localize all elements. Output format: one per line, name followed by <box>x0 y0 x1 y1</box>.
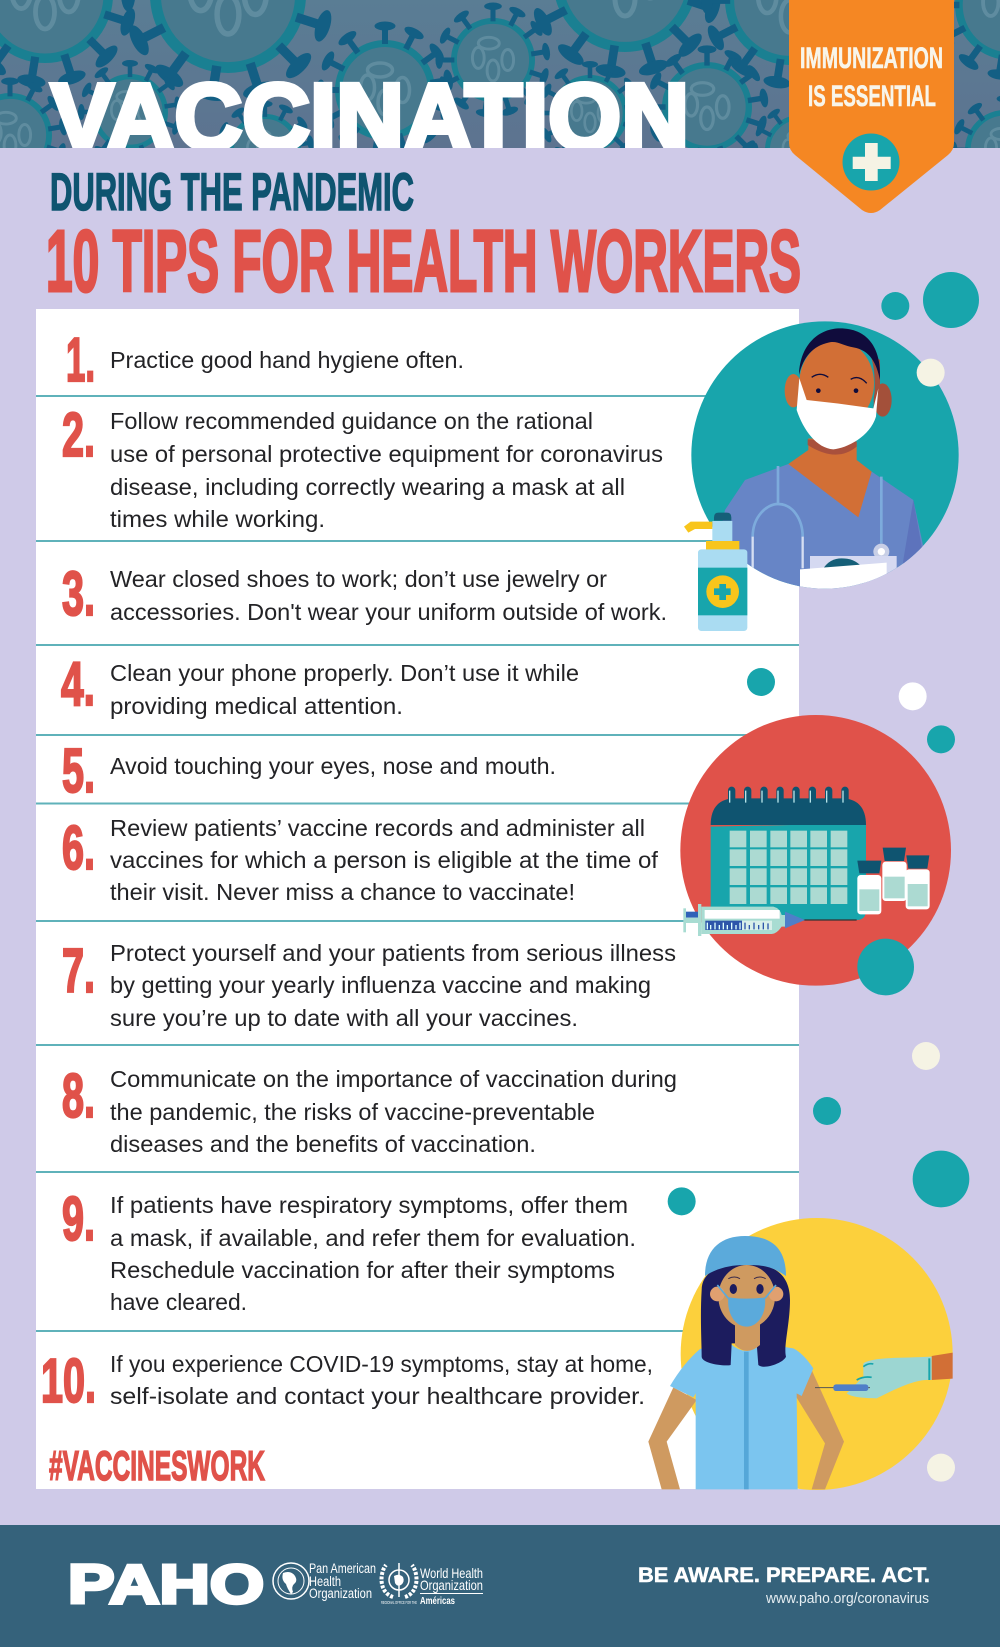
tip 6 <box>62 814 659 905</box>
tip 8: the pandemic, the risks of vaccine-preventable <box>110 1099 595 1125</box>
tip 1: Practice good hand hygiene often. <box>110 347 464 373</box>
icon: calendar <box>711 787 866 920</box>
tip 9: 9. <box>62 1185 95 1254</box>
icon: syringe <box>683 904 857 936</box>
icon: sanitizer bottle <box>684 513 747 631</box>
tip 1: 1. <box>66 326 95 395</box>
logo: PAHO wordmark: PAHO <box>68 1553 264 1615</box>
tip 8: 8. <box>62 1062 95 1131</box>
website: www.paho.org/coronavirus <box>765 1590 929 1607</box>
text: World Health Organization Americas: Américas <box>420 1595 455 1607</box>
tip 10: self-isolate and contact your healthcare provider. <box>110 1383 645 1409</box>
panel: tips list <box>36 309 799 1489</box>
slogan: BE AWARE. PREPARE. ACT. <box>638 1564 930 1587</box>
footer band <box>0 1525 1000 1647</box>
tip 7: 7. <box>62 937 95 1006</box>
tip 2: Follow recommended guidance on the rational <box>110 408 593 434</box>
tip 3 <box>62 560 667 629</box>
tip 5: Avoid touching your eyes, nose and mouth. <box>110 753 556 779</box>
header virus pattern band <box>0 0 1000 148</box>
text: World Health Organization Americas <box>381 1565 483 1607</box>
decorative dots between illustrations <box>813 1042 940 1125</box>
icon: PAHO globe emblem <box>273 1563 309 1599</box>
tip 2: 2. <box>62 401 95 470</box>
icon: gloved hand with syringe <box>815 1353 953 1398</box>
icon: vials <box>857 848 930 914</box>
text: World Health Organization Americas: Organization <box>420 1577 483 1593</box>
tip 1 <box>66 326 464 395</box>
tip 4: providing medical attention. <box>110 693 403 719</box>
tip 7 <box>62 937 676 1031</box>
tip 2 <box>62 401 663 532</box>
icon: WHO emblem <box>382 1563 416 1597</box>
tip 8 <box>62 1062 677 1157</box>
tip 2: times while working. <box>110 506 325 532</box>
title: vaccination: VACCINATION <box>51 64 689 169</box>
tip 7: by getting your yearly influenza vaccine and making <box>110 972 651 998</box>
orange ribbon: immunization is essential <box>789 0 954 213</box>
tip 9 <box>62 1185 636 1315</box>
tip 8: diseases and the benefits of vaccination. <box>110 1131 536 1157</box>
tip 9: Reschedule vaccination for after their symptoms <box>110 1257 615 1283</box>
tip 4 <box>61 650 579 719</box>
illustration: nurse with hand sanitizer <box>684 272 979 631</box>
tip 8: Communicate on the importance of vaccination during <box>110 1066 677 1092</box>
tip 4: 4. <box>61 650 95 719</box>
hashtag: #VACCINESWORK <box>49 1442 265 1489</box>
tip 7: sure you’re up to date with all your vaccines. <box>110 1005 578 1031</box>
text: Pan American Health Organization: Health <box>309 1574 341 1589</box>
tip 6: 6. <box>62 814 95 883</box>
tip 4: Clean your phone properly. Don’t use it while <box>110 660 579 686</box>
tip 3: 3. <box>62 560 95 629</box>
tip 3: accessories. Don't wear your uniform outside of work. <box>110 599 667 625</box>
text: Pan American Health Organization <box>309 1561 376 1601</box>
tip 6: Review patients’ vaccine records and administer all <box>110 815 645 841</box>
tip 2: disease, including correctly wearing a mask at all <box>110 474 625 500</box>
tip 6: their visit. Never miss a chance to vaccinate! <box>110 879 575 905</box>
tip 9: If patients have respiratory symptoms, offer them <box>110 1192 628 1218</box>
tip 6: vaccines for which a person is eligible at the time of <box>110 847 659 873</box>
text: World Health Organization Americas: World Health <box>420 1565 483 1581</box>
illustration: calendar, vials and syringe <box>680 668 955 995</box>
tip 9: a mask, if available, and refer them for evaluation. <box>110 1225 636 1251</box>
subtitle: during the pandemic: DURING THE PANDEMIC <box>50 163 414 222</box>
illustration: health worker vaccinated <box>648 1151 969 1490</box>
tip 10: 10. <box>41 1347 96 1416</box>
tip 2: use of personal protective equipment for coronavirus <box>110 441 663 467</box>
text: Pan American Health Organization: Pan American <box>309 1561 376 1576</box>
tip 9: have cleared. <box>110 1289 247 1315</box>
tip 7: Protect yourself and your patients from serious illness <box>110 940 676 966</box>
tip 5: 5. <box>62 737 95 806</box>
text: Pan American Health Organization: Organization <box>309 1586 372 1601</box>
tip 10: If you experience COVID-19 symptoms, stay at home, <box>110 1351 653 1377</box>
text: World Health Organization Americas: REGIONAL OFFICE FOR THE <box>381 1600 417 1605</box>
tip 3: Wear closed shoes to work; don’t use jewelry or <box>110 566 607 592</box>
figure: woman with cap and mask <box>648 1236 844 1489</box>
tip 5 <box>62 737 556 806</box>
tip 10 <box>41 1347 653 1416</box>
